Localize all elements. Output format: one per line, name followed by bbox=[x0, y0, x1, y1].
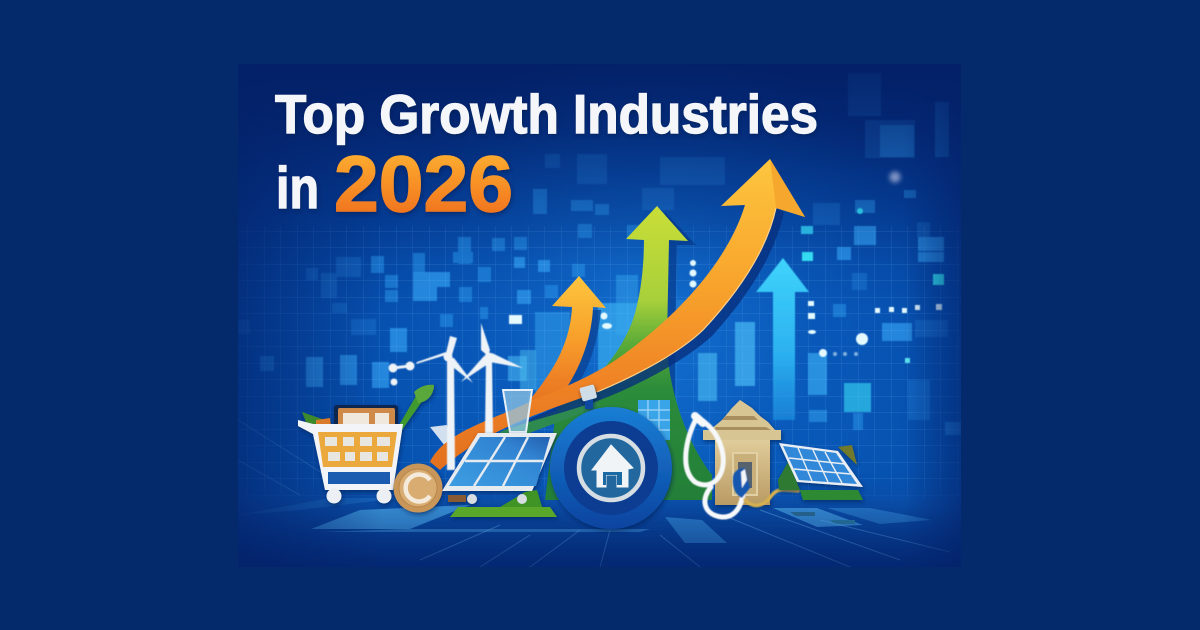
title line 2: in: in bbox=[276, 156, 319, 221]
icon: shopping cart bbox=[298, 385, 434, 504]
icon: connected dots bbox=[388, 362, 414, 386]
icon: large solar panel bbox=[442, 433, 557, 517]
gauge cap bbox=[579, 384, 597, 409]
panel: infographic image bbox=[238, 64, 961, 567]
icon: small solar panel bbox=[778, 443, 863, 500]
cart basket bbox=[298, 420, 403, 490]
title line 2: 2026: 2026 bbox=[334, 139, 513, 228]
arrow: large orange rising arrow bbox=[430, 159, 805, 470]
arrow: cyan rising arrow bbox=[756, 258, 809, 420]
icon: coin bbox=[394, 464, 442, 512]
glowing data dots bbox=[509, 172, 944, 363]
icon: blue gauge with house bbox=[550, 384, 672, 529]
house symbol bbox=[592, 445, 633, 487]
icon: small building behind gauge bbox=[638, 400, 670, 440]
gold tube bbox=[745, 490, 798, 505]
panel background gradient bbox=[238, 92, 961, 503]
icon: white funnel bbox=[430, 425, 448, 444]
arrow: small orange rising arrow bbox=[532, 276, 606, 401]
background grid lines bbox=[238, 226, 961, 500]
arrow: green rising arrow bbox=[545, 206, 712, 500]
vignette bbox=[238, 64, 961, 567]
title line 1: Top Growth Industries bbox=[275, 83, 818, 145]
background pixel squares bbox=[238, 73, 961, 435]
background bar chart columns bbox=[508, 275, 871, 422]
panel cells bbox=[449, 437, 550, 486]
cart goods bbox=[302, 385, 434, 430]
icon: classical temple bbox=[703, 400, 781, 505]
icon: glass bbox=[503, 390, 532, 432]
icon: wind turbines bbox=[388, 323, 523, 470]
panel stand bbox=[448, 490, 557, 517]
icon: green strip below band bbox=[500, 402, 600, 433]
perspective floor bbox=[238, 420, 961, 567]
panel frame bbox=[442, 433, 557, 491]
icon: stethoscope bbox=[686, 416, 798, 517]
title bbox=[274, 92, 818, 216]
